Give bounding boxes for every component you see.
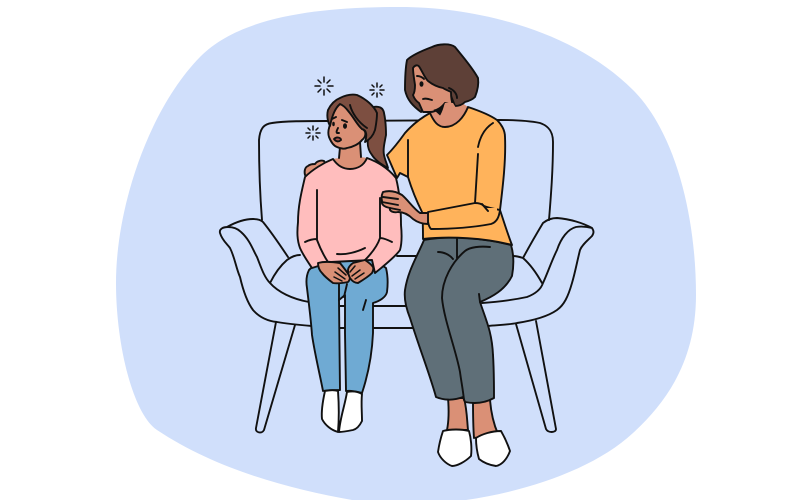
- girl jeans: [306, 250, 388, 393]
- sparkle icons: [306, 77, 384, 140]
- woman's hand on girl's arm: [382, 191, 428, 224]
- girl socks: [322, 390, 362, 432]
- girl sweater: [297, 158, 402, 273]
- girl left hand: [318, 262, 350, 283]
- sparkle lower left: [306, 126, 320, 140]
- girl hands: [318, 260, 373, 283]
- background blob: [116, 7, 696, 500]
- armchair: [220, 120, 594, 432]
- right leg: [516, 321, 556, 432]
- girl right hand: [348, 260, 373, 283]
- chair seat lines: [340, 256, 420, 328]
- woman mouth: [423, 99, 432, 100]
- woman shoes: [438, 430, 510, 466]
- girl: [297, 95, 402, 432]
- girl head: [328, 104, 365, 149]
- left leg: [256, 322, 295, 432]
- girl hair: [327, 95, 377, 142]
- girl neck: [333, 140, 367, 169]
- woman: [387, 44, 513, 466]
- girl ponytail: [368, 107, 388, 168]
- girl mouth: [334, 137, 341, 141]
- sparkle top left: [315, 77, 333, 95]
- left arm: [220, 219, 312, 326]
- chair back: [259, 120, 553, 220]
- girl eyes: [332, 117, 347, 133]
- sparkle top right: [370, 83, 384, 97]
- woman eyebrow and eye: [417, 76, 424, 79]
- woman sweater: [387, 107, 512, 245]
- woman neck: [425, 98, 468, 127]
- right arm: [482, 218, 594, 326]
- woman face: [413, 65, 453, 112]
- woman hair: [405, 44, 478, 112]
- woman's hand on shoulder: [305, 161, 330, 182]
- woman neck shadow: [434, 104, 444, 115]
- woman ankles: [447, 398, 498, 438]
- woman sleeve forearm: [428, 203, 500, 229]
- woman trousers: [405, 238, 513, 403]
